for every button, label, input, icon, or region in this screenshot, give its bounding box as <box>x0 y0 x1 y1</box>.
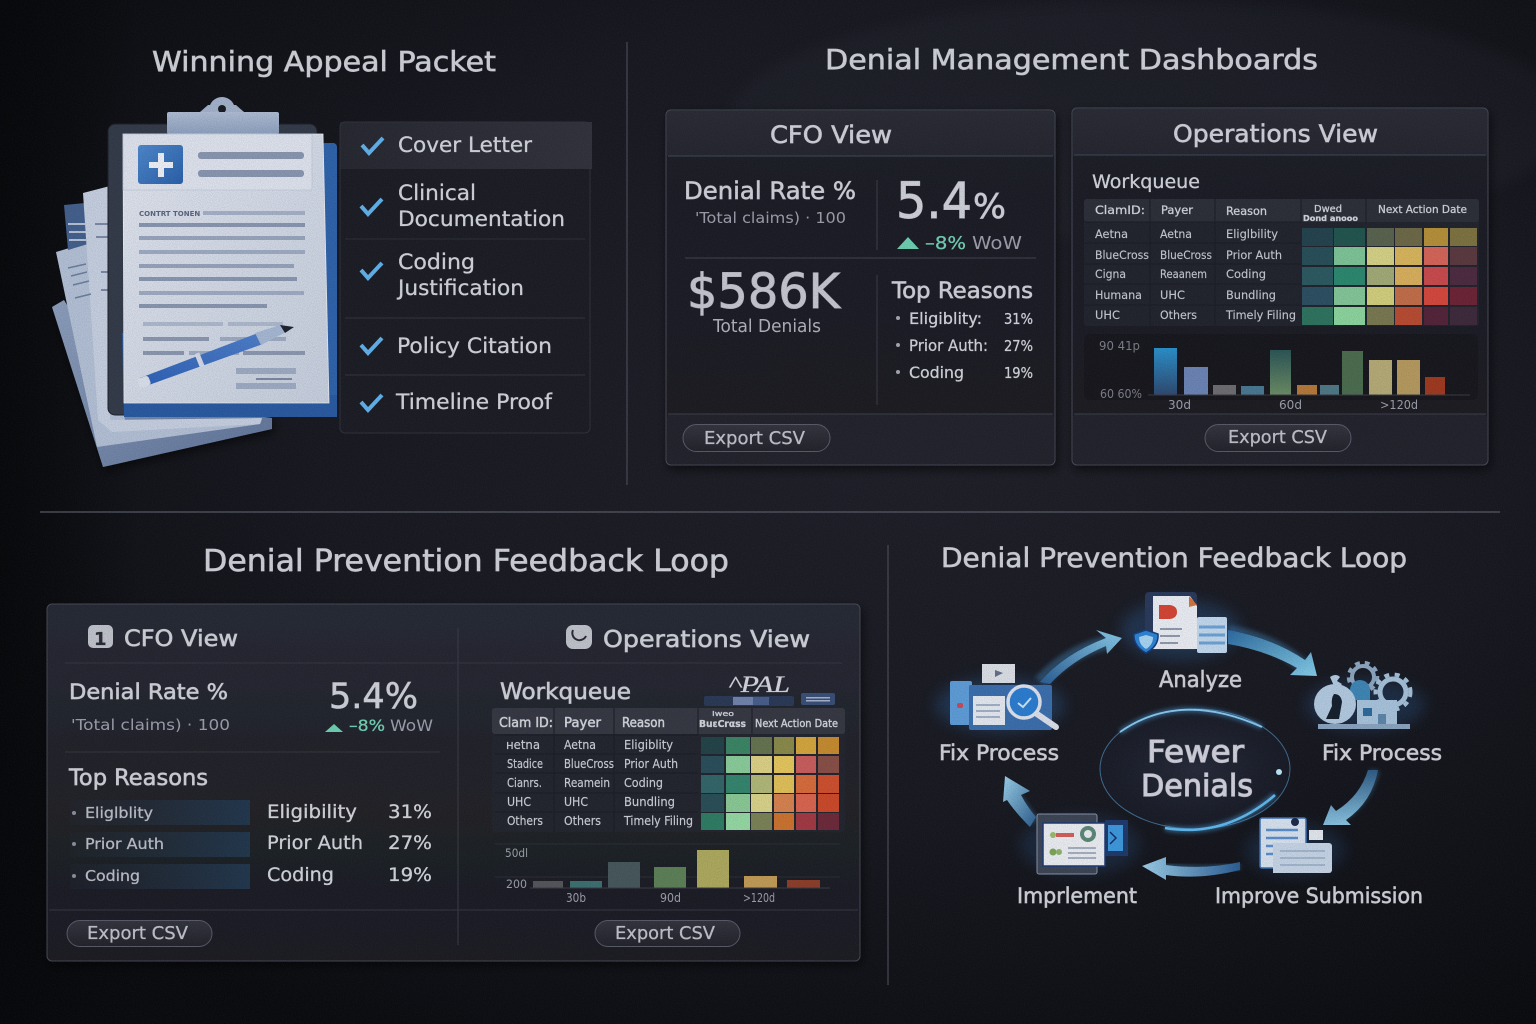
heat map grid <box>701 737 839 830</box>
button: Export CSV <box>1205 424 1351 452</box>
table: workqueue with heat map: ClamID: <box>1095 203 1145 217</box>
panel title: Operations View: Operations View <box>603 627 810 653</box>
heading: Denial Management Dashboards: Denial Management Dashboards <box>825 43 1318 76</box>
metric: 5.4% with week over week change <box>896 172 1022 254</box>
table: workqueue with heat map: Timely Filing <box>623 814 693 828</box>
heat map grid <box>1302 228 1477 325</box>
table: workqueue with heat map: Others <box>1160 308 1197 322</box>
checklist item: Clinical Documentation: Documentation <box>398 207 565 231</box>
checklist item: Clinical Documentation: Clinical <box>398 181 476 205</box>
icon: gears and person <box>1300 662 1430 731</box>
bar chart: aging: 200 <box>506 877 527 891</box>
icon: operations badge <box>566 625 592 649</box>
button: Export CSV <box>595 920 740 946</box>
table: workqueue with heat map: Reamein <box>564 776 610 790</box>
metric: denial rate <box>684 177 856 227</box>
list: top reasons: Top Reasons <box>68 766 208 791</box>
panel: combined CFO and Operations dashboard <box>47 604 860 961</box>
illustration: clipboard with appeal documents: CONTRT TONEN <box>139 210 200 218</box>
bar chart: aging: 60d <box>1279 398 1302 412</box>
button: Export CSV: Export CSV <box>615 923 716 944</box>
checklist item: Policy Citation: Policy Citation <box>397 334 552 358</box>
panel title: CFO View: CFO View <box>124 627 238 652</box>
heading: Workqueue: Workqueue <box>1092 171 1200 193</box>
bar chart: aging: 30d <box>1168 398 1191 412</box>
table: workqueue with heat map: BlueCross <box>564 757 614 771</box>
checklist item: Coding Justification <box>361 250 524 300</box>
table: workqueue with heat map: Aetna <box>1160 227 1192 241</box>
list: top reasons: 19% <box>388 864 432 886</box>
bar chart: aging <box>495 844 840 905</box>
table: workqueue with heat map: Reaanem <box>1160 267 1207 281</box>
table: workqueue with heat map: Clam ID: <box>499 716 553 731</box>
table: workqueue with heat map: BlueCross <box>1160 248 1212 262</box>
heading: Denial Prevention Feedback Loop (left): Denial Prevention Feedback Loop <box>203 544 729 579</box>
illustration: clipboard with appeal documents <box>52 97 337 467</box>
list: top reasons: Eligiblity: <box>909 309 982 328</box>
table: workqueue with heat map <box>1084 199 1479 326</box>
list: top reasons: Coding <box>267 864 334 886</box>
checklist item: Timeline Proof: Timeline Proof <box>395 390 553 414</box>
bar chart: aging: >120d <box>743 891 775 905</box>
metric: denial rate <box>69 680 230 734</box>
label: Imprlement: Imprlement <box>1017 884 1137 908</box>
center: Fewer Denials: Fewer <box>1147 735 1245 770</box>
center: Fewer Denials <box>1100 709 1290 830</box>
icon: number 1 badge <box>88 625 113 650</box>
scribbled label and toolbar <box>704 672 835 706</box>
heading: Winning Appeal Packet: Winning Appeal Packet <box>152 45 496 78</box>
label: Fix Process (right): Fix Process <box>1322 741 1442 765</box>
metric: total denials: Total Denials <box>712 316 821 337</box>
icon: submission documents <box>1245 818 1345 876</box>
panel: CFO View <box>666 110 1055 465</box>
center: Fewer Denials: Denials <box>1141 769 1253 804</box>
bar chart: aging: 30b <box>566 891 586 905</box>
metric: 5.4% with week over week change: –8% <box>925 233 966 254</box>
list: top reasons <box>891 279 1033 382</box>
panel: Operations View <box>1072 108 1488 465</box>
table: workqueue with heat map: Bundling <box>624 795 675 809</box>
list: top reasons: 31% <box>1004 310 1033 328</box>
table: workqueue with heat map: UHC <box>1160 288 1185 302</box>
table: workqueue with heat map: Reason <box>1226 204 1267 218</box>
bar chart: aging: >120d <box>1380 398 1418 412</box>
table: workqueue with heat map: Prior Auth <box>624 757 678 771</box>
table: workqueue with heat map: Dond anooo <box>1303 214 1358 223</box>
metric: 5.4%: WoW <box>390 716 433 735</box>
metric: 5.4%: –8% <box>349 716 385 735</box>
table: workqueue with heat map: Aetna <box>564 738 596 752</box>
metric: denial rate: 'Total claims) · 100 <box>695 209 846 227</box>
button: Export CSV: Export CSV <box>704 428 806 449</box>
table: workqueue with heat map: Timely Filing <box>1225 308 1296 322</box>
arrow: fix process to analyze <box>1040 630 1122 684</box>
table: workqueue with heat map: Coding <box>624 776 663 790</box>
table: workqueue with heat map: UHC <box>1095 308 1120 322</box>
list: top reasons: 31% <box>388 801 432 823</box>
list: top reasons: 27% <box>388 832 432 854</box>
metric: total denials: $586K <box>687 264 842 320</box>
checklist item: Cover Letter: Cover Letter <box>398 133 532 157</box>
metric: 5.4% with week over week change: WoW <box>972 233 1022 254</box>
icon: analyze documents <box>1120 592 1240 660</box>
icon: implementation checklist screen <box>1020 814 1140 875</box>
list: top reasons: Eliglblity <box>85 804 153 822</box>
metric: 5.4% <box>325 677 433 735</box>
checklist item: Coding Justification: Coding <box>398 250 475 274</box>
table: workqueue with heat map: Payer <box>1161 203 1193 217</box>
table: workqueue with heat map: Others <box>564 814 601 828</box>
panel title: Operations View <box>1173 120 1378 148</box>
table: workqueue with heat map: Bundling <box>1226 288 1276 302</box>
icon: pen <box>137 325 294 389</box>
table: workqueue with heat map: Eligiblity <box>624 738 673 752</box>
arrow: analyze to fix process <box>1228 630 1317 676</box>
list: top reasons <box>68 766 432 889</box>
table: workqueue with heat map: Iweo <box>712 710 734 718</box>
metric: denial rate: 'Total claims) · 100 <box>71 716 230 734</box>
button: Export CSV <box>683 424 830 452</box>
table: workqueue with heat map: Others <box>507 814 543 828</box>
metric: denial rate: Denial Rate % <box>684 177 856 205</box>
table: workqueue with heat map: Cigna <box>1095 267 1126 281</box>
table: workqueue with heat map: BuεCrαss <box>699 719 746 730</box>
bar chart: aging: 90d <box>660 891 681 905</box>
bar chart: aging: 50dl <box>505 846 528 860</box>
label: Fix Process (left): Fix Process <box>939 741 1059 765</box>
table: workqueue with heat map: Dwed <box>1314 204 1342 215</box>
table: workqueue with heat map: Cianrs. <box>507 776 542 790</box>
panel: appeal packet checklist <box>340 122 592 433</box>
diagram: feedback loop <box>925 592 1442 908</box>
list: top reasons: Prior Auth: <box>909 336 988 355</box>
bar chart: aging: 90 41p <box>1099 339 1140 353</box>
arrow: improve submission to implement <box>1142 857 1240 880</box>
list: top reasons: 27% <box>1004 337 1033 355</box>
bar chart: aging: 60 60% <box>1100 387 1142 401</box>
list: top reasons: Coding <box>909 363 964 382</box>
icon: number 1 badge: 1 <box>94 629 107 650</box>
list: top reasons: Prior Auth <box>267 832 363 854</box>
table: workqueue with heat map: Next Action Date <box>1378 203 1467 216</box>
panel title: CFO View <box>770 121 892 149</box>
table: workqueue with heat map: Aetna <box>1095 227 1128 241</box>
metric: 5.4%: 5.4% <box>329 677 418 717</box>
list: top reasons: Top Reasons <box>891 279 1033 304</box>
table: workqueue with heat map: Next Action Date <box>755 717 838 730</box>
label: Analyze: Analyze <box>1159 668 1242 693</box>
table: workqueue with heat map: UHC <box>507 795 531 809</box>
table: workqueue with heat map: Humana <box>1095 288 1142 302</box>
metric: 5.4% with week over week change: % <box>973 187 1006 227</box>
checklist item: Coding Justification: Justification <box>396 276 524 300</box>
table: workqueue with heat map: Payer <box>564 716 602 731</box>
list: top reasons: Prior Auth <box>85 835 164 853</box>
table: workqueue with heat map: Prior Auth <box>1226 248 1282 262</box>
heading: Workqueue: Workqueue <box>500 680 631 705</box>
table: workqueue with heat map <box>492 708 845 832</box>
label: Improve Submission: Improve Submission <box>1215 884 1423 908</box>
table: workqueue with heat map: Eliglbility <box>1226 227 1278 241</box>
table: workqueue with heat map: ʜetna <box>506 738 540 752</box>
button: Export CSV <box>67 920 212 946</box>
list: top reasons: Eligibility <box>267 801 357 823</box>
list: top reasons: 19% <box>1004 364 1033 382</box>
table: workqueue with heat map: Stadice <box>507 757 543 771</box>
arrow: fix process to improve submission <box>1323 770 1378 825</box>
metric: denial rate: Denial Rate % <box>69 680 228 704</box>
button: Export CSV: Export CSV <box>87 923 189 944</box>
scribbled label and toolbar: ^PAL <box>728 672 790 697</box>
table: workqueue with heat map: Reason <box>622 716 665 731</box>
table: workqueue with heat map: BlueCross <box>1095 248 1149 262</box>
metric: 5.4% with week over week change: 5.4 <box>896 172 972 230</box>
bar chart: aging <box>1084 334 1478 412</box>
arrow: implement to fix process <box>1003 776 1036 827</box>
heading: Denial Prevention Feedback Loop (right): Denial Prevention Feedback Loop <box>941 543 1407 574</box>
list: top reasons: Coding <box>85 867 140 885</box>
checklist item: Clinical Documentation <box>361 181 565 231</box>
table: workqueue with heat map: UHC <box>564 795 588 809</box>
icon: magnifying glass over forms <box>925 664 1070 733</box>
button: Export CSV: Export CSV <box>1228 427 1328 448</box>
table: workqueue with heat map: Coding <box>1226 267 1266 281</box>
